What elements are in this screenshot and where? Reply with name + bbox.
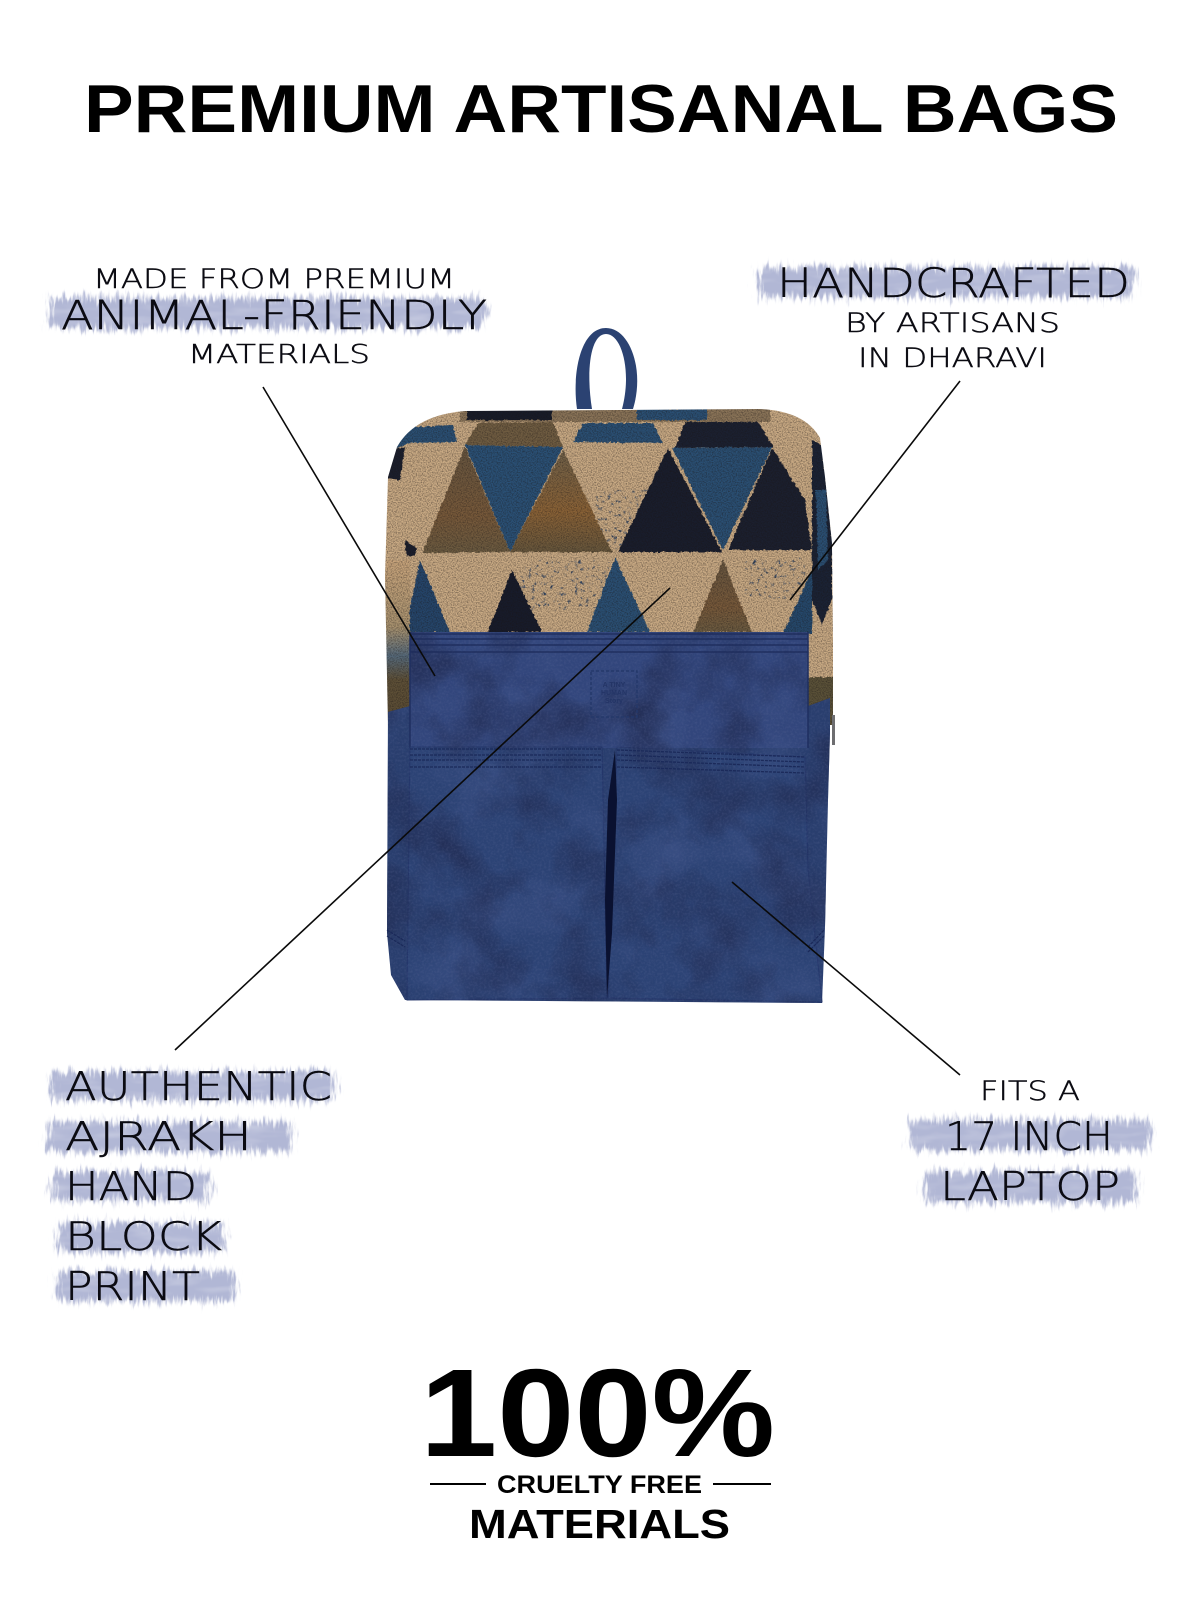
callout: animal-friendly materials: MADE FROM PREMIUM: [93, 264, 455, 295]
callout: handcrafted: IN DHARAVI: [858, 343, 1047, 374]
callout: handcrafted: [758, 261, 1134, 374]
callout: authentic ajrakh hand block print: BLOCK: [65, 1215, 223, 1260]
top leather panel: [410, 632, 808, 748]
leader line: handcrafted: [790, 381, 960, 600]
left pocket: [407, 747, 607, 1000]
embossed logo patch: Story: [605, 698, 623, 705]
badge: 100% cruelty free materials: 100%: [420, 1344, 775, 1483]
callout: authentic ajrakh hand block print: PRINT: [65, 1265, 200, 1310]
callout: animal-friendly materials: ANIMAL-FRIENDLY: [61, 293, 487, 339]
product photo: backpack: [380, 328, 840, 1003]
pocket slot: [605, 750, 617, 998]
badge: 100% cruelty free materials: [420, 1344, 775, 1547]
embossed logo patch: HUMAN: [601, 690, 627, 697]
woven ajrakh fabric panel: [380, 405, 840, 730]
callout: handcrafted: HANDCRAFTED: [777, 261, 1130, 307]
zipper pull: [832, 715, 835, 745]
title: PREMIUM ARTISANAL BAGS: [84, 71, 1118, 147]
panel stitching: [410, 632, 808, 748]
leader line: materials: [263, 387, 435, 676]
badge: 100% cruelty free materials: MATERIALS: [469, 1501, 730, 1547]
callout: animal-friendly materials: MATERIALS: [188, 340, 370, 370]
embossed logo patch: [591, 671, 637, 717]
callout: authentic ajrakh hand block print: AJRAKH: [65, 1115, 252, 1160]
callout: fits a 17 inch laptop: 17 INCH: [945, 1115, 1113, 1160]
right pocket: [608, 747, 822, 1002]
callout: authentic ajrakh hand block print: HAND: [65, 1165, 197, 1210]
pocket stitching: [387, 749, 824, 952]
callout: authentic ajrakh hand block print: AUTHENTIC: [65, 1065, 332, 1110]
badge: 100% cruelty free materials: CRUELTY FREE: [497, 1471, 702, 1499]
callout: fits a 17 inch laptop: [910, 1076, 1150, 1210]
callout: handcrafted: BY ARTISANS: [845, 308, 1060, 339]
callout: fits a 17 inch laptop: FITS A: [980, 1076, 1080, 1107]
callout: fits a 17 inch laptop: LAPTOP: [940, 1165, 1120, 1210]
embossed logo patch: A TINY: [603, 682, 626, 689]
leader line: ajrakh print: [175, 588, 670, 1050]
leather body: [387, 698, 830, 1003]
handle loop: [576, 328, 637, 409]
leader line: laptop: [732, 882, 960, 1075]
callout: animal-friendly materials: [48, 264, 487, 370]
callout: authentic ajrakh hand block print: [47, 1065, 334, 1310]
